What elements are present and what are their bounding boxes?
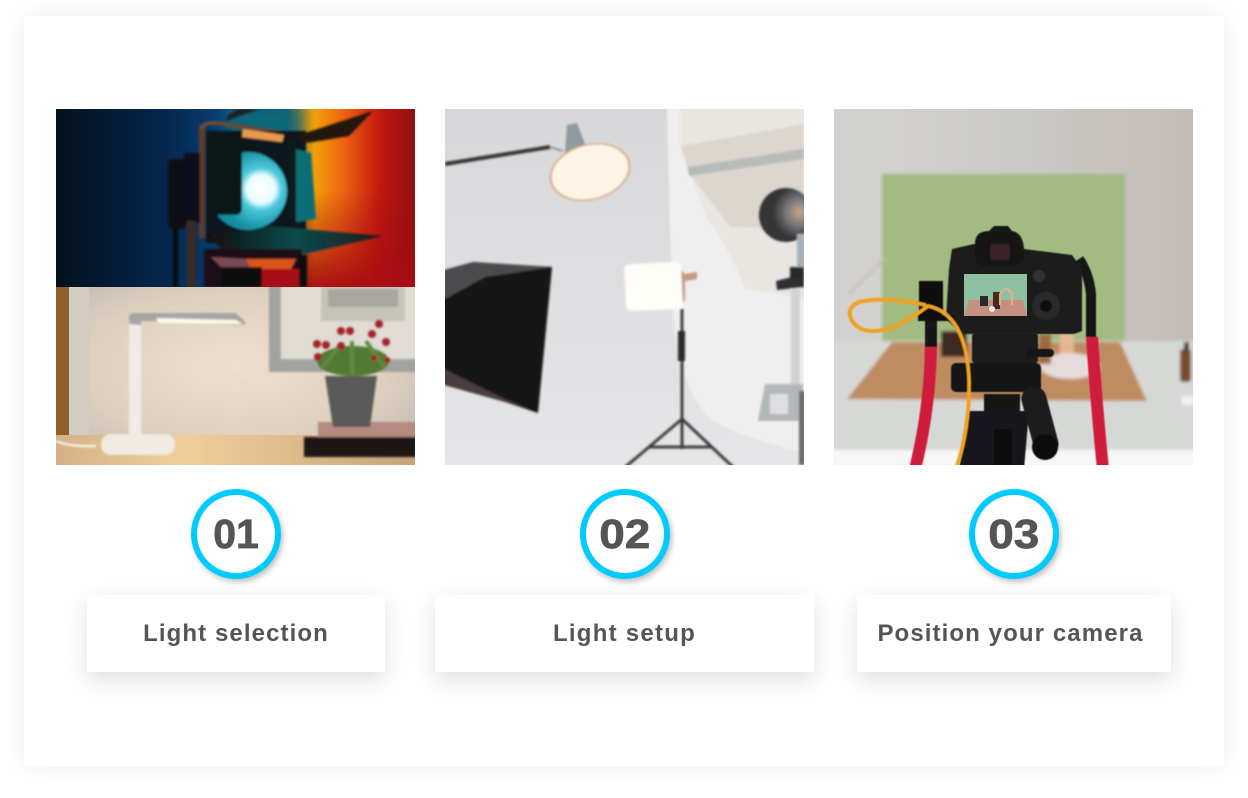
desk surface <box>56 435 415 465</box>
orange cable <box>850 300 969 469</box>
tripod <box>951 333 1058 469</box>
lamp <box>56 313 246 455</box>
camera screen <box>964 274 1027 316</box>
heading number 02 <box>580 489 670 579</box>
heading number 01 <box>191 489 281 579</box>
label: light selection: Light selection <box>143 620 329 647</box>
round softbox lamp <box>445 123 637 210</box>
camera body <box>918 226 1082 334</box>
heading number 03: 03 <box>988 511 1040 557</box>
photo: camera on tripod <box>834 109 1193 465</box>
red straps <box>915 259 1103 469</box>
label: position your camera: Position your camera <box>877 620 1144 647</box>
label: light setup <box>435 595 814 672</box>
label: light selection <box>87 595 385 672</box>
desk lamp scene <box>56 281 419 465</box>
picture frame <box>269 281 419 372</box>
label: position your camera <box>857 595 1171 672</box>
photo: stage light and desk lamp <box>56 109 415 465</box>
small square panel light and tripod <box>623 262 735 469</box>
photo: studio light setup <box>445 109 804 465</box>
black softbox <box>440 262 552 413</box>
label: light setup: Light setup <box>553 620 696 647</box>
studio background <box>440 104 809 470</box>
stage light scene <box>56 109 415 287</box>
potted plant and books <box>304 320 418 457</box>
heading number 01: 01 <box>213 511 259 557</box>
heading number 02: 02 <box>599 511 651 557</box>
heading number 03 <box>969 489 1059 579</box>
backdrop and table <box>829 104 1198 470</box>
right side lamp and stand <box>758 188 813 465</box>
